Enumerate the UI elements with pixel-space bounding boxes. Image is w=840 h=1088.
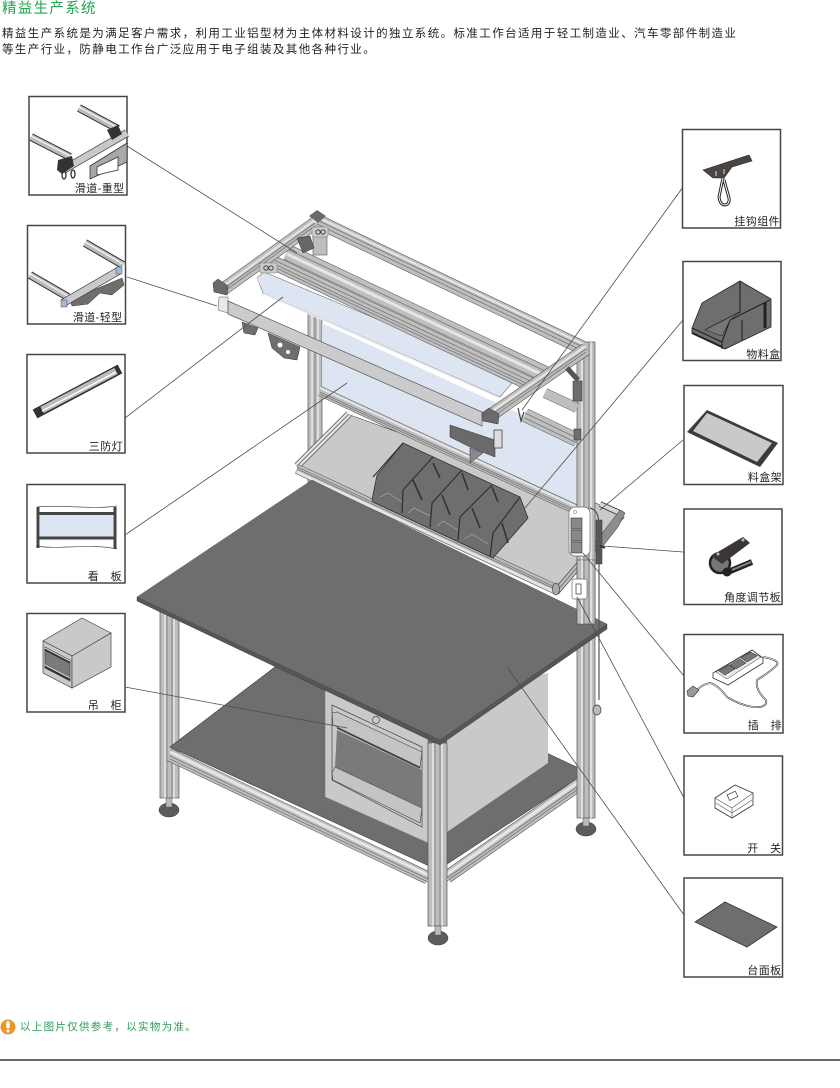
tray shelf [297, 414, 623, 593]
overhead frame [213, 210, 586, 463]
bottom rule [0, 1059, 840, 1061]
thumbnail: material bin: 物料盒 [746, 347, 780, 361]
intro text [2, 27, 737, 56]
upright above tabletop [577, 560, 595, 624]
thumbnail: bin rack: 料盒架 [748, 470, 782, 484]
thumbnail: tabletop: 台面板 [747, 963, 782, 977]
thumbnail: material bin [683, 262, 781, 361]
switch [572, 579, 587, 599]
lower shelf [170, 641, 587, 882]
thumbnail: switch: 开 关 [747, 841, 782, 855]
thumbnail: heavy slide rail: 滑道-重型 [75, 181, 124, 195]
thumbnail: lamp: 三防灯 [89, 439, 123, 453]
thumbnail: hanging cabinet: 吊 柜 [88, 699, 122, 712]
thumbnail: display board [27, 484, 125, 583]
thumbnail: lamp [27, 354, 125, 453]
tray front rail [297, 467, 625, 595]
material bins [372, 443, 528, 558]
thumbnail: hanging cabinet [27, 614, 125, 712]
title: 精益生产系统 [2, 1, 97, 17]
thumbnail: heavy slide rail [29, 96, 127, 195]
thumbnail: light slide rail [28, 226, 126, 324]
intro text: 精益生产系统是为满足客户需求，利用工业铝型材为主体材料设计的独立系统。标准工作台适用于轻工制造业、汽车零部件制造业 [2, 28, 737, 40]
thumbnail: display board: 看 板 [88, 569, 122, 583]
thumbnail: hook assembly: 挂钩组件 [734, 214, 780, 228]
footnote icon [0, 1020, 16, 1034]
front center leg [428, 743, 448, 945]
callout leader lines [125, 146, 684, 915]
thumbnail: hook assembly [682, 130, 780, 228]
power strip and cord [569, 507, 601, 715]
workstation [137, 210, 625, 945]
footnote: 以上图片仅供参考，以实物为准。 [20, 1021, 197, 1033]
panel lower bar [320, 388, 590, 519]
thumbnail: power strip [684, 634, 783, 733]
intro text: 等生产行业，防静电工作台广泛应用于电子组装及其他各种行业。 [2, 44, 376, 56]
thumbnail: power strip: 插 排 [748, 718, 782, 732]
thumbnail: light slide rail: 滑道-轻型 [73, 310, 122, 324]
thumbnail: tabletop [684, 878, 782, 977]
cabinet [325, 673, 548, 843]
thumbnail: bin rack [684, 386, 783, 484]
rear left and front left legs with feet [159, 612, 596, 836]
angle bracket [596, 520, 605, 564]
thumbnail: switch [684, 756, 782, 855]
thumbnail: angle adjust plate: 角度调节板 [724, 590, 781, 604]
thumbnail: angle adjust plate [684, 509, 782, 604]
right rear upright [577, 342, 595, 818]
tabletop [137, 480, 607, 745]
display panel [322, 323, 577, 507]
left rear upright [308, 233, 327, 496]
